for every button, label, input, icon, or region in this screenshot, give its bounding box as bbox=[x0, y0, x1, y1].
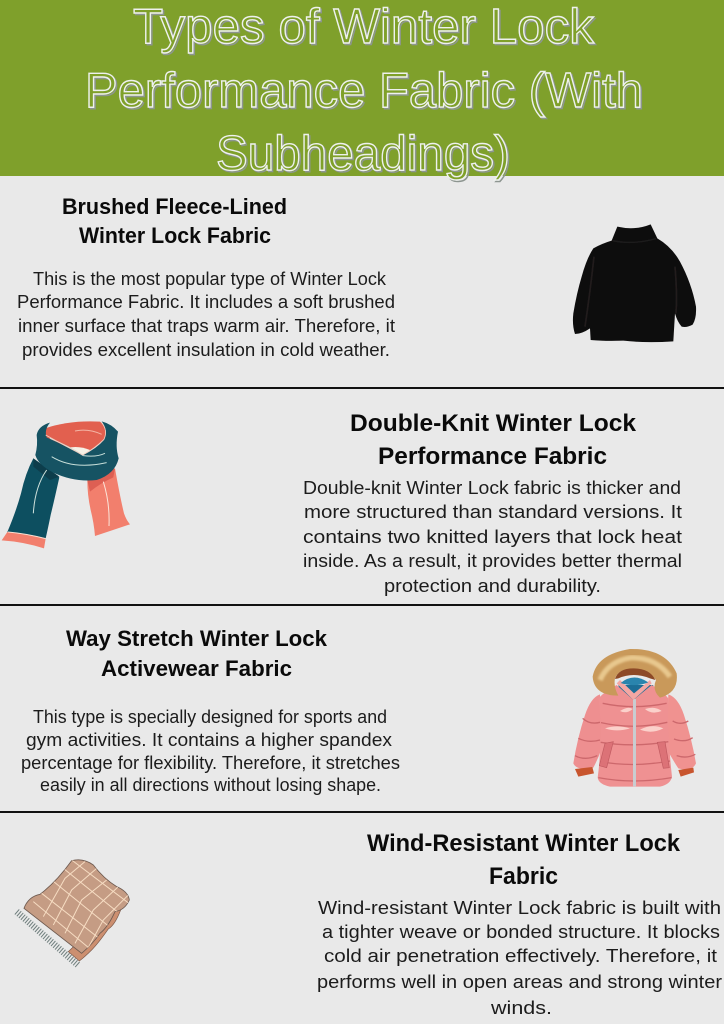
text: wind-resistant description: cold air penetration effectively. Therefore, it bbox=[324, 946, 717, 966]
icon: black fleece sweater bbox=[573, 224, 696, 342]
text: double-knit description: protection and durability. bbox=[384, 576, 601, 596]
title: Types of Winter Lock bbox=[134, 2, 596, 56]
text: double-knit description bbox=[303, 478, 682, 596]
heading: wind-resistant: Wind-Resistant Winter Lock bbox=[367, 830, 681, 857]
icon: plaid blanket with fringe bbox=[17, 860, 133, 966]
text: way stretch description: gym activities. It contains a higher spandex bbox=[26, 730, 392, 750]
text: wind-resistant description: a tighter weave or bonded structure. It blocks bbox=[322, 922, 720, 942]
text: brushed fleece description: Performance Fabric. It includes a soft brushed bbox=[17, 292, 395, 312]
panel: brushed fleece-lined fabric bbox=[17, 194, 696, 360]
text: brushed fleece description: inner surface that traps warm air. Therefore, it bbox=[18, 316, 395, 336]
heading: brushed fleece bbox=[62, 194, 287, 248]
text: wind-resistant description: performs well in open areas and strong winter bbox=[317, 972, 722, 992]
icon: teal and coral scarf bbox=[2, 421, 130, 548]
heading: way stretch: Activewear Fabric bbox=[101, 656, 292, 681]
heading: double-knit: Double-Knit Winter Lock bbox=[350, 410, 637, 437]
heading: wind-resistant bbox=[367, 830, 681, 890]
text: double-knit description: contains two knitted layers that lock heat bbox=[303, 527, 682, 547]
divider bbox=[0, 811, 724, 813]
title: Performance Fabric (With bbox=[86, 66, 644, 120]
heading: way stretch: Way Stretch Winter Lock bbox=[66, 626, 328, 651]
heading: way stretch bbox=[66, 626, 328, 681]
text: double-knit description: inside. As a result, it provides better thermal bbox=[303, 551, 682, 571]
heading: brushed fleece: Brushed Fleece-Lined bbox=[62, 194, 287, 219]
title bbox=[85, 0, 644, 182]
title: Performance Fabric (With bbox=[85, 64, 643, 118]
text: wind-resistant description: Wind-resistant Winter Lock fabric is built with bbox=[318, 898, 721, 918]
title: Subheadings) bbox=[218, 128, 512, 182]
heading: double-knit bbox=[350, 410, 637, 470]
text: wind-resistant description: winds. bbox=[490, 998, 552, 1018]
text: way stretch description: This type is specially designed for sports and bbox=[33, 707, 387, 727]
text: double-knit description: Double-knit Winter Lock fabric is thicker and bbox=[303, 478, 681, 498]
panel: double-knit fabric bbox=[2, 410, 682, 596]
heading: double-knit: Performance Fabric bbox=[378, 443, 607, 470]
panel: wind-resistant fabric bbox=[17, 830, 722, 1018]
title: Types of Winter Lock bbox=[133, 0, 594, 54]
divider bbox=[0, 604, 724, 606]
text: way stretch description: easily in all directions without losing shape. bbox=[40, 775, 381, 795]
text: way stretch description bbox=[21, 707, 400, 795]
header banner bbox=[0, 0, 724, 176]
panel: way stretch fabric bbox=[21, 626, 696, 795]
text: brushed fleece description: This is the most popular type of Winter Lock bbox=[33, 269, 387, 289]
icon: pink puffer jacket bbox=[573, 649, 696, 787]
heading: wind-resistant: Fabric bbox=[489, 863, 558, 890]
heading: brushed fleece: Winter Lock Fabric bbox=[79, 223, 271, 248]
text: wind-resistant description bbox=[317, 898, 722, 1018]
text: brushed fleece description bbox=[17, 269, 395, 360]
text: brushed fleece description: provides excellent insulation in cold weather. bbox=[22, 340, 390, 360]
title: Subheadings) bbox=[216, 127, 510, 181]
text: way stretch description: percentage for flexibility. Therefore, it stretches bbox=[21, 753, 400, 773]
text: double-knit description: more structured than standard versions. It bbox=[304, 502, 682, 522]
divider bbox=[0, 387, 724, 389]
